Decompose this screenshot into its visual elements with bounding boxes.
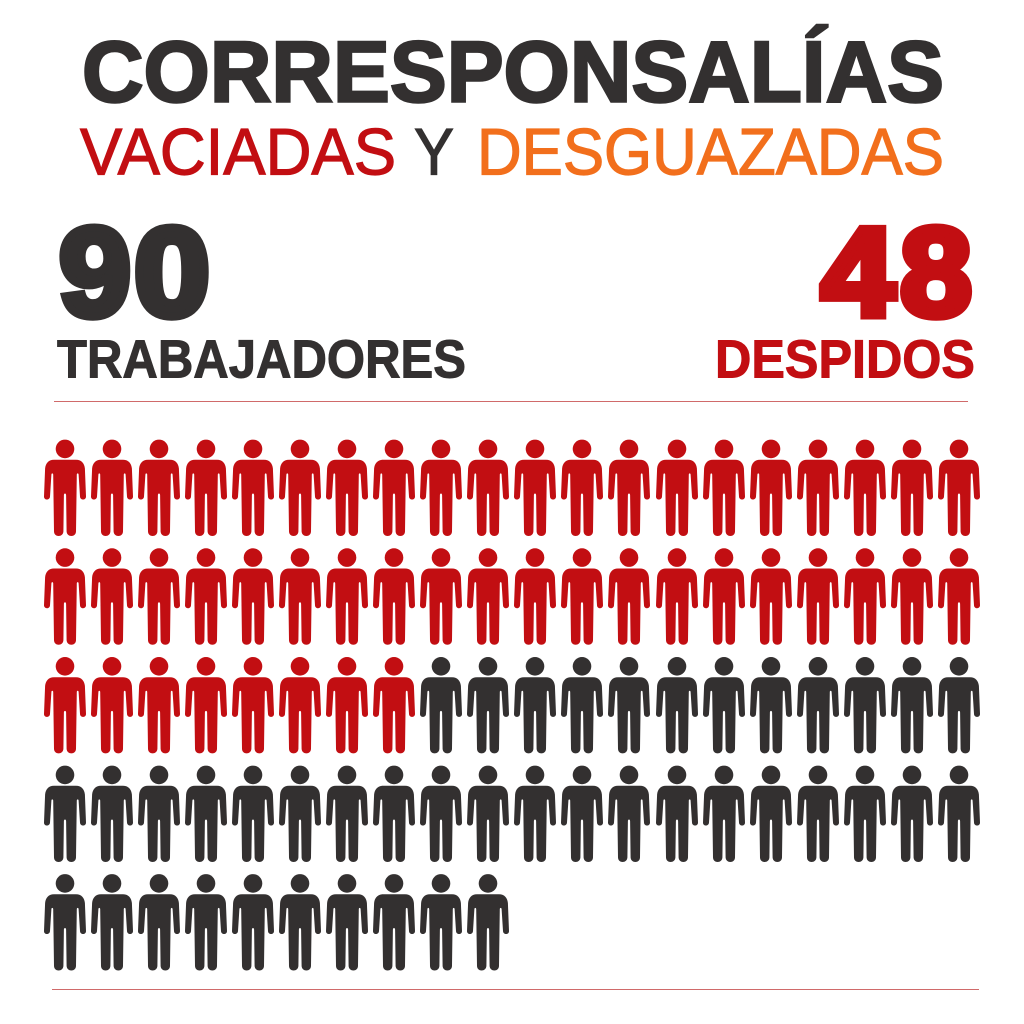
subtitle word: desguazadas: DESGUAZADAS	[477, 114, 944, 188]
subtitle	[80, 114, 944, 188]
number 48: 8	[900, 202, 972, 342]
row 1: red figures	[44, 440, 980, 536]
number 48: 4	[821, 202, 895, 342]
row 2: red figures	[44, 548, 980, 645]
title: CORRESPONSALÍAS	[82, 25, 944, 121]
stat: 48 despidos	[715, 202, 975, 390]
row 4: dark figures	[44, 766, 980, 862]
label despidos: DESPIDOS	[715, 330, 975, 390]
row 3: red figures	[44, 657, 415, 753]
subtitle word: vaciadas: VACIADAS	[80, 114, 396, 188]
stat: 90 trabajadores	[57, 202, 466, 390]
row 3: dark figures	[420, 657, 980, 753]
number 48	[821, 202, 972, 342]
row 5: dark figures	[44, 874, 509, 970]
subtitle word: y: Y	[414, 114, 454, 188]
pictogram: 90 workers	[44, 440, 980, 971]
number 90	[59, 202, 210, 342]
number 90: 0	[134, 202, 210, 342]
label trabajadores: TRABAJADORES	[57, 330, 466, 390]
number 90: 9	[59, 202, 131, 342]
